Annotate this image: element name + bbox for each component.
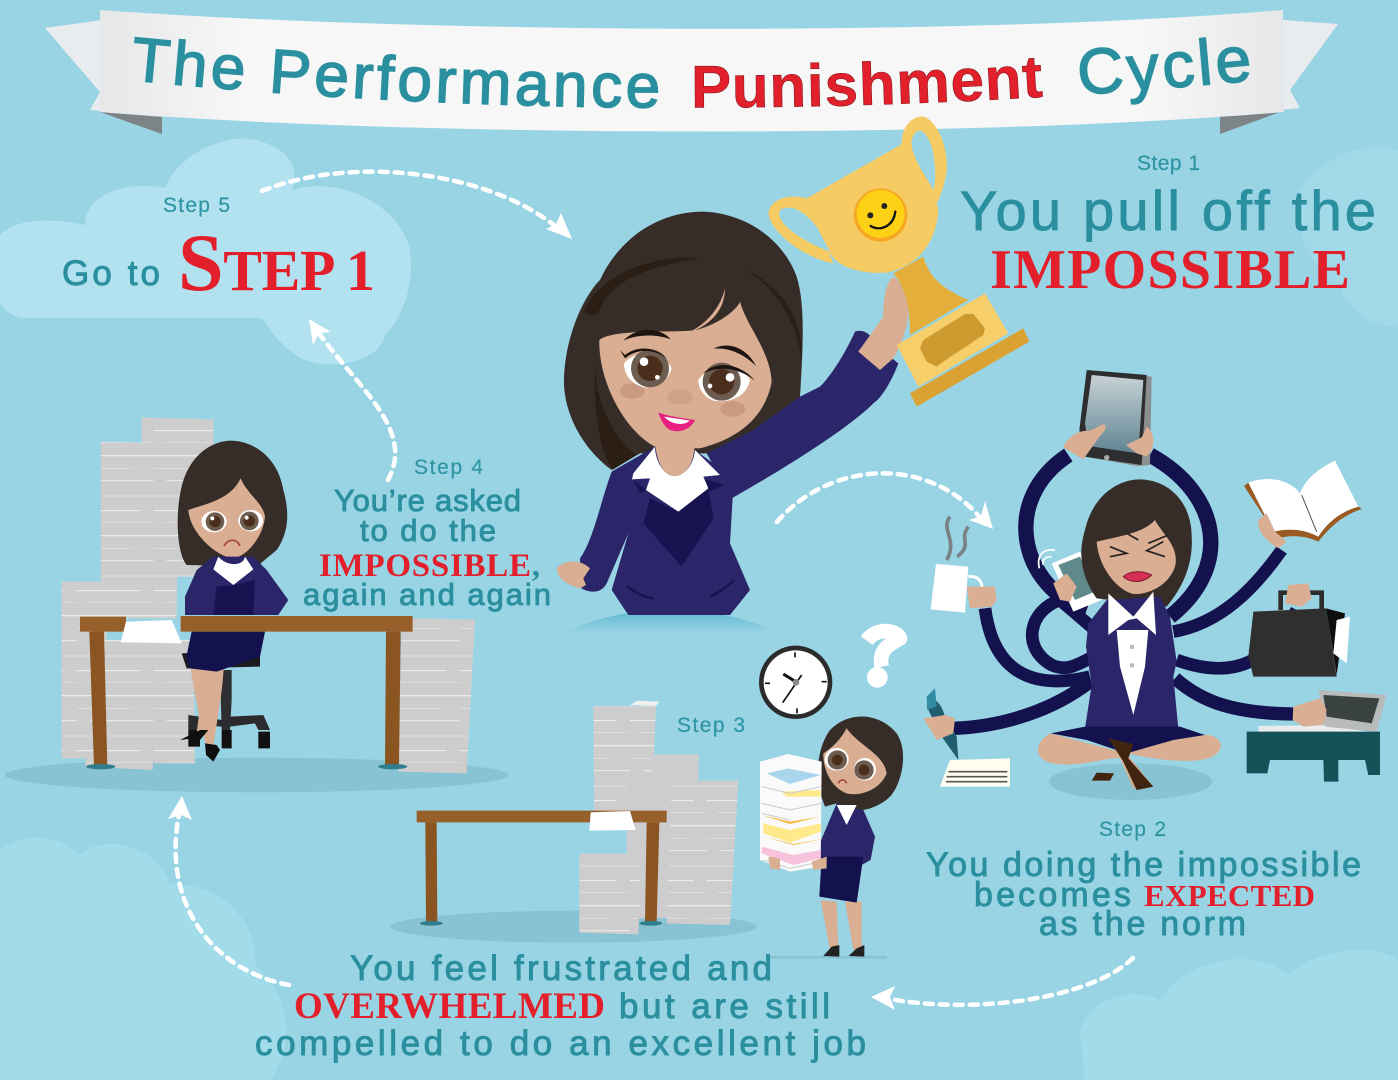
skirt bbox=[186, 632, 265, 672]
icon: trophy bbox=[768, 117, 1029, 407]
handle left bbox=[768, 197, 833, 263]
hair back bbox=[564, 212, 803, 470]
handle right bbox=[902, 117, 947, 213]
step 2 text: as the norm bbox=[1039, 905, 1246, 943]
hair bbox=[1081, 479, 1192, 607]
step 5 text: Go to bbox=[62, 254, 160, 293]
book bbox=[1244, 461, 1362, 548]
coffee mug bbox=[931, 564, 997, 613]
arrow: step 3 to step 4 bbox=[168, 796, 289, 985]
step 1 text: Step 1 bbox=[1137, 152, 1200, 175]
step 3 text bbox=[255, 714, 866, 1063]
trophy base bbox=[897, 293, 1008, 387]
pen bbox=[923, 688, 958, 760]
skirt bbox=[1051, 727, 1205, 753]
desk shadow bbox=[390, 911, 757, 943]
steam bbox=[947, 517, 968, 560]
figure: multitasking woman bbox=[923, 370, 1387, 800]
paper stacks bbox=[62, 417, 475, 773]
cloud: lower right bbox=[1080, 950, 1398, 1080]
step 1 text: You pull off the bbox=[960, 179, 1376, 242]
face bbox=[823, 728, 887, 794]
note paper bbox=[940, 758, 1010, 787]
step 1 text bbox=[960, 152, 1376, 301]
tablet hands bbox=[1063, 424, 1153, 459]
figure: woman raising trophy bbox=[557, 117, 1029, 633]
icon: question mark bbox=[867, 631, 900, 688]
paper on desk bbox=[121, 620, 182, 643]
arms bbox=[953, 455, 1297, 728]
hair bbox=[178, 441, 287, 567]
step 4 text: Step 4 bbox=[414, 456, 483, 479]
hair strand bbox=[685, 288, 725, 334]
step 4 text: again and again bbox=[303, 577, 551, 612]
face bbox=[188, 478, 265, 558]
step 4 text: IMPOSSIBLE, bbox=[319, 548, 540, 584]
hair highlight bbox=[583, 258, 802, 360]
step 5 text bbox=[62, 194, 375, 308]
paper pile bbox=[760, 754, 827, 872]
floor line bbox=[770, 956, 887, 959]
legs bbox=[190, 662, 224, 745]
ribbon face bbox=[100, 10, 1284, 132]
blouse bbox=[1117, 630, 1148, 715]
frown bbox=[224, 540, 240, 546]
jacket body bbox=[612, 447, 750, 615]
figure: desk with stacks bbox=[390, 631, 903, 959]
arrow: step 5 to step 1 bbox=[262, 172, 572, 239]
right hand with fist bbox=[557, 561, 590, 588]
right ribbon tail bbox=[1220, 20, 1338, 116]
jacket arm raised bbox=[707, 331, 898, 498]
left eye bbox=[620, 349, 672, 387]
hair shadow bbox=[595, 343, 637, 469]
cloud: top right bbox=[1297, 147, 1398, 326]
frown bbox=[838, 780, 847, 783]
laptop bbox=[1258, 690, 1387, 733]
step 1 text: IMPOSSIBLE bbox=[990, 239, 1350, 301]
buttons bbox=[1130, 645, 1134, 667]
cheeks bbox=[620, 383, 645, 399]
legs bbox=[821, 900, 862, 950]
legs bbox=[1038, 733, 1221, 789]
collar bbox=[213, 557, 253, 585]
cloud: behind step 5 bbox=[0, 139, 411, 364]
collar bbox=[632, 447, 720, 512]
left ribbon tail bbox=[45, 20, 162, 117]
step 4 text: to do the bbox=[360, 513, 496, 548]
paper stacks back bbox=[593, 701, 699, 918]
chair bbox=[182, 650, 270, 748]
desk shadow bbox=[5, 758, 509, 792]
jacket left arm bbox=[580, 472, 633, 592]
nose bbox=[667, 390, 693, 405]
mouth bbox=[1123, 572, 1152, 581]
trophy stem bbox=[893, 257, 968, 335]
title text: Cycle bbox=[1080, 37, 1250, 105]
desk bbox=[80, 616, 413, 769]
step 2 text: becomes bbox=[974, 876, 1131, 914]
small woman bbox=[760, 717, 903, 957]
collar bbox=[1108, 592, 1156, 635]
handle gap left bbox=[779, 207, 830, 252]
step 3 text: OVERWHELMED bbox=[294, 986, 605, 1027]
tablet bbox=[1079, 370, 1152, 466]
shoes bbox=[1092, 738, 1153, 790]
eyebrows bbox=[623, 330, 756, 366]
podium shadow bbox=[563, 610, 777, 633]
skirt bbox=[819, 857, 863, 903]
step 4 text: You’re asked bbox=[334, 483, 521, 518]
step 2 text: EXPECTED bbox=[1144, 878, 1315, 913]
face bbox=[599, 302, 772, 448]
desk bbox=[417, 811, 667, 926]
briefcase bbox=[1248, 583, 1350, 677]
trophy plinth bbox=[910, 328, 1029, 407]
phone bbox=[1039, 550, 1102, 612]
jacket inner bbox=[213, 580, 255, 615]
ribbon fold left bbox=[100, 112, 162, 134]
raised hand bbox=[858, 277, 908, 370]
jacket bbox=[1085, 597, 1178, 728]
step 3 text: compelled to do an excellent job bbox=[255, 1024, 866, 1063]
mouth bbox=[658, 413, 695, 431]
lapel shade bbox=[633, 478, 724, 493]
step 5 text: Step 5 bbox=[163, 194, 230, 217]
arrow: step 1 to step 2 bbox=[777, 473, 993, 529]
cup bbox=[807, 143, 938, 273]
seat shadow bbox=[1049, 763, 1212, 800]
low table bbox=[1247, 732, 1380, 782]
neck bbox=[655, 437, 695, 476]
step 3 text: but are still bbox=[619, 987, 830, 1026]
collar bbox=[837, 805, 857, 825]
cloud: lower left bbox=[0, 837, 286, 1080]
title text: The Performance bbox=[134, 36, 658, 109]
hair bbox=[818, 717, 903, 811]
shoes bbox=[180, 730, 220, 762]
trophy plate bbox=[920, 314, 985, 367]
step 4 text bbox=[303, 456, 551, 612]
pockets bbox=[627, 581, 734, 598]
title text: Punishment bbox=[694, 58, 1043, 108]
title banner bbox=[45, 10, 1338, 134]
step 3 text: Step 3 bbox=[677, 714, 745, 737]
right eye bbox=[698, 363, 755, 401]
eyes bbox=[825, 748, 876, 781]
step 3 text: You feel frustrated and bbox=[350, 949, 772, 988]
shoes bbox=[823, 945, 864, 957]
figure: woman at desk bbox=[5, 417, 509, 792]
handle gap right bbox=[912, 131, 935, 190]
ribbon fold right bbox=[1220, 111, 1283, 134]
icon: smiley bbox=[854, 188, 907, 242]
face bbox=[1097, 520, 1176, 594]
hands bbox=[768, 857, 827, 870]
jacket bbox=[185, 557, 288, 615]
icon: clock bbox=[759, 646, 832, 719]
jacket inner bbox=[643, 488, 713, 567]
jacket bbox=[818, 803, 875, 865]
step 5 text: STEP 1 bbox=[178, 217, 375, 308]
paper stacks front bbox=[579, 781, 738, 934]
arrow: step 2 to step 3 bbox=[871, 958, 1133, 1010]
step 2 text: Step 2 bbox=[1099, 818, 1166, 841]
step 2 text bbox=[926, 818, 1361, 943]
step 2 text: You doing the impossible bbox=[926, 846, 1361, 884]
eyes and brows closed bbox=[1110, 533, 1168, 557]
title text bbox=[134, 36, 1250, 109]
arrow: step 4 to step 5 bbox=[309, 319, 395, 480]
cheek right bbox=[720, 401, 745, 417]
eyes bbox=[201, 510, 263, 532]
